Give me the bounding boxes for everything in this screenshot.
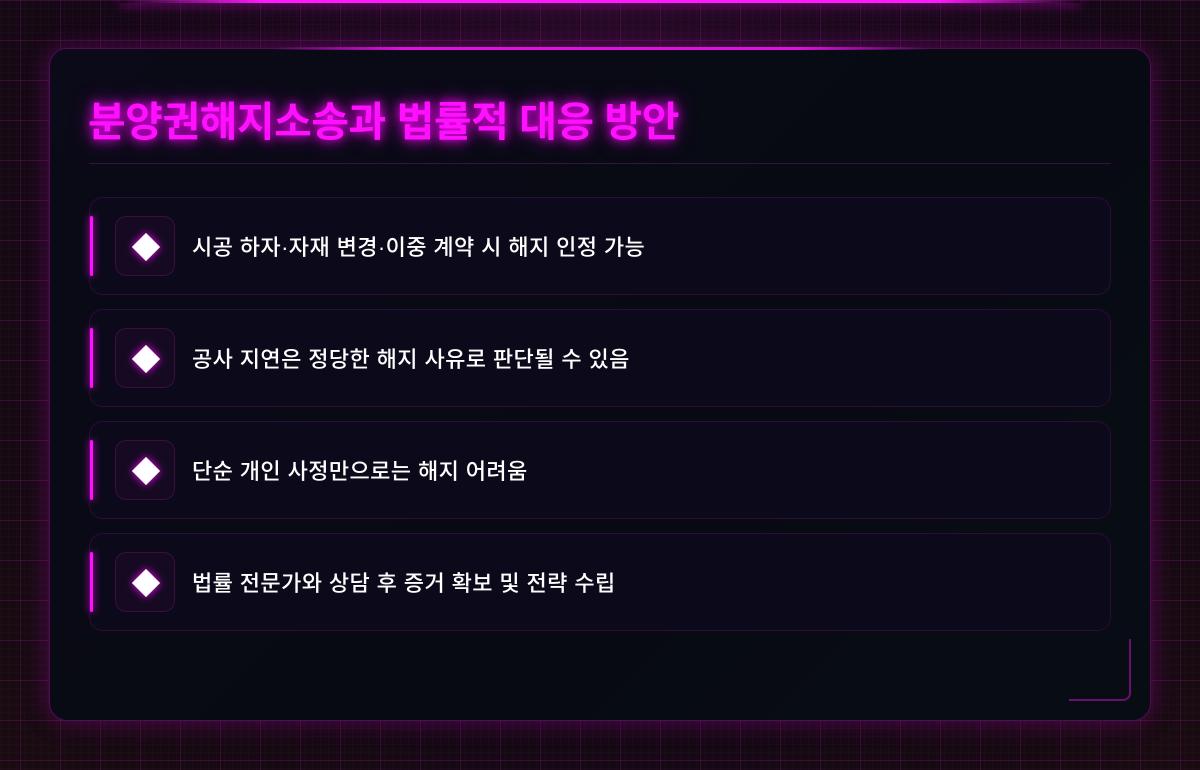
text: 시공 하자·자재 변경·이중 계약 시 해지 인정 가능 — [192, 235, 645, 260]
text: 공사 지연은 정당한 해지 사유로 판단될 수 있음 — [192, 347, 630, 372]
corner bracket — [1069, 639, 1131, 701]
item 2 — [89, 309, 1111, 407]
icon: diamond — [115, 216, 175, 276]
item 4 — [89, 533, 1111, 631]
icon: diamond — [115, 552, 175, 612]
icon: diamond — [115, 328, 175, 388]
text: 법률 전문가와 상담 후 증거 확보 및 전략 수립 — [192, 571, 616, 596]
icon: diamond — [115, 440, 175, 500]
item 1 — [89, 197, 1111, 295]
text: 단순 개인 사정만으로는 해지 어려움 — [192, 459, 528, 484]
item 3 — [89, 421, 1111, 519]
title: 분양권해지소송과 법률적 대응 방안 — [88, 99, 679, 145]
